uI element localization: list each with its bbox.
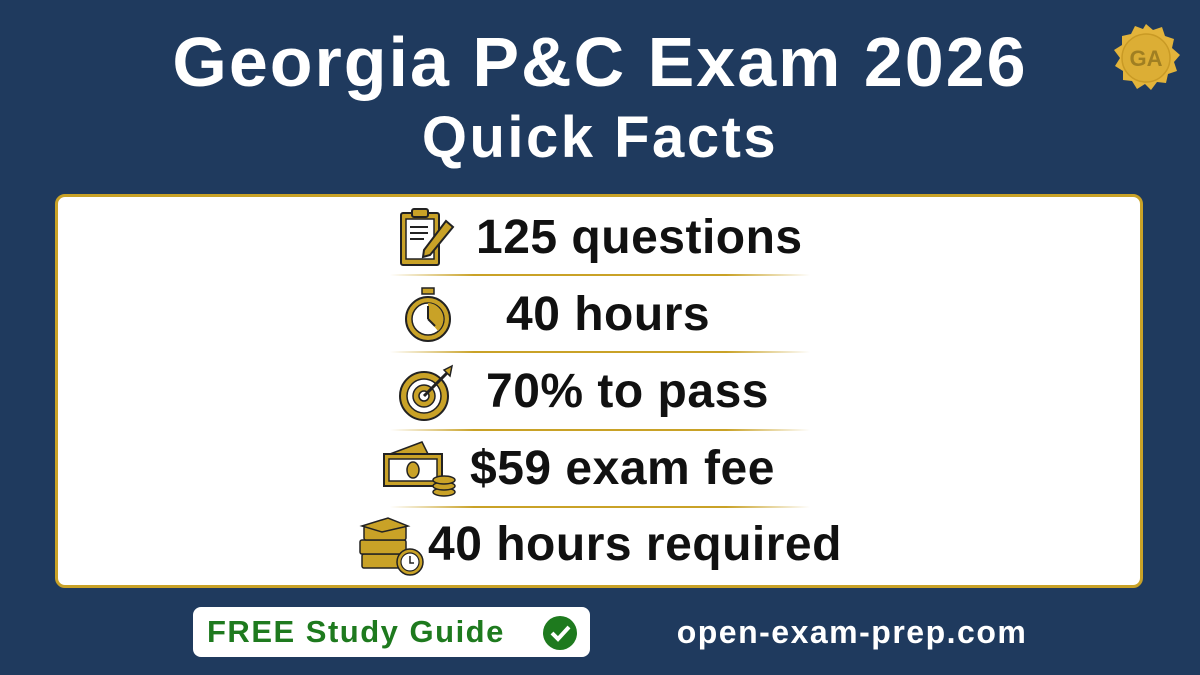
text: $59 exam fee: $59 exam fee: [470, 442, 775, 495]
text: 40 hours required: 40 hours required: [428, 518, 842, 571]
icon: target: [399, 364, 453, 421]
icon: money: [383, 441, 456, 497]
text: 40 hours: 40 hours: [506, 288, 710, 341]
title: Georgia P&C Exam 2026: [172, 23, 1028, 101]
button: FREE Study Guide: [193, 607, 590, 657]
footer url: open-exam-prep.com: [677, 614, 1027, 650]
icon: check: [543, 616, 577, 650]
text: 70% to pass: 70% to pass: [486, 365, 769, 418]
text: 125 questions: 125 questions: [476, 211, 803, 264]
icon: stopwatch: [405, 287, 451, 342]
badge: GA seal: GA: [1130, 46, 1163, 71]
subtitle: Quick Facts: [422, 105, 778, 170]
badge: GA seal: [1114, 24, 1180, 90]
button: FREE Study Guide: FREE Study Guide: [207, 614, 505, 649]
panel: quick facts: [55, 194, 1143, 588]
icon: clipboard: [400, 208, 454, 266]
icon: books with clock: [359, 517, 424, 576]
